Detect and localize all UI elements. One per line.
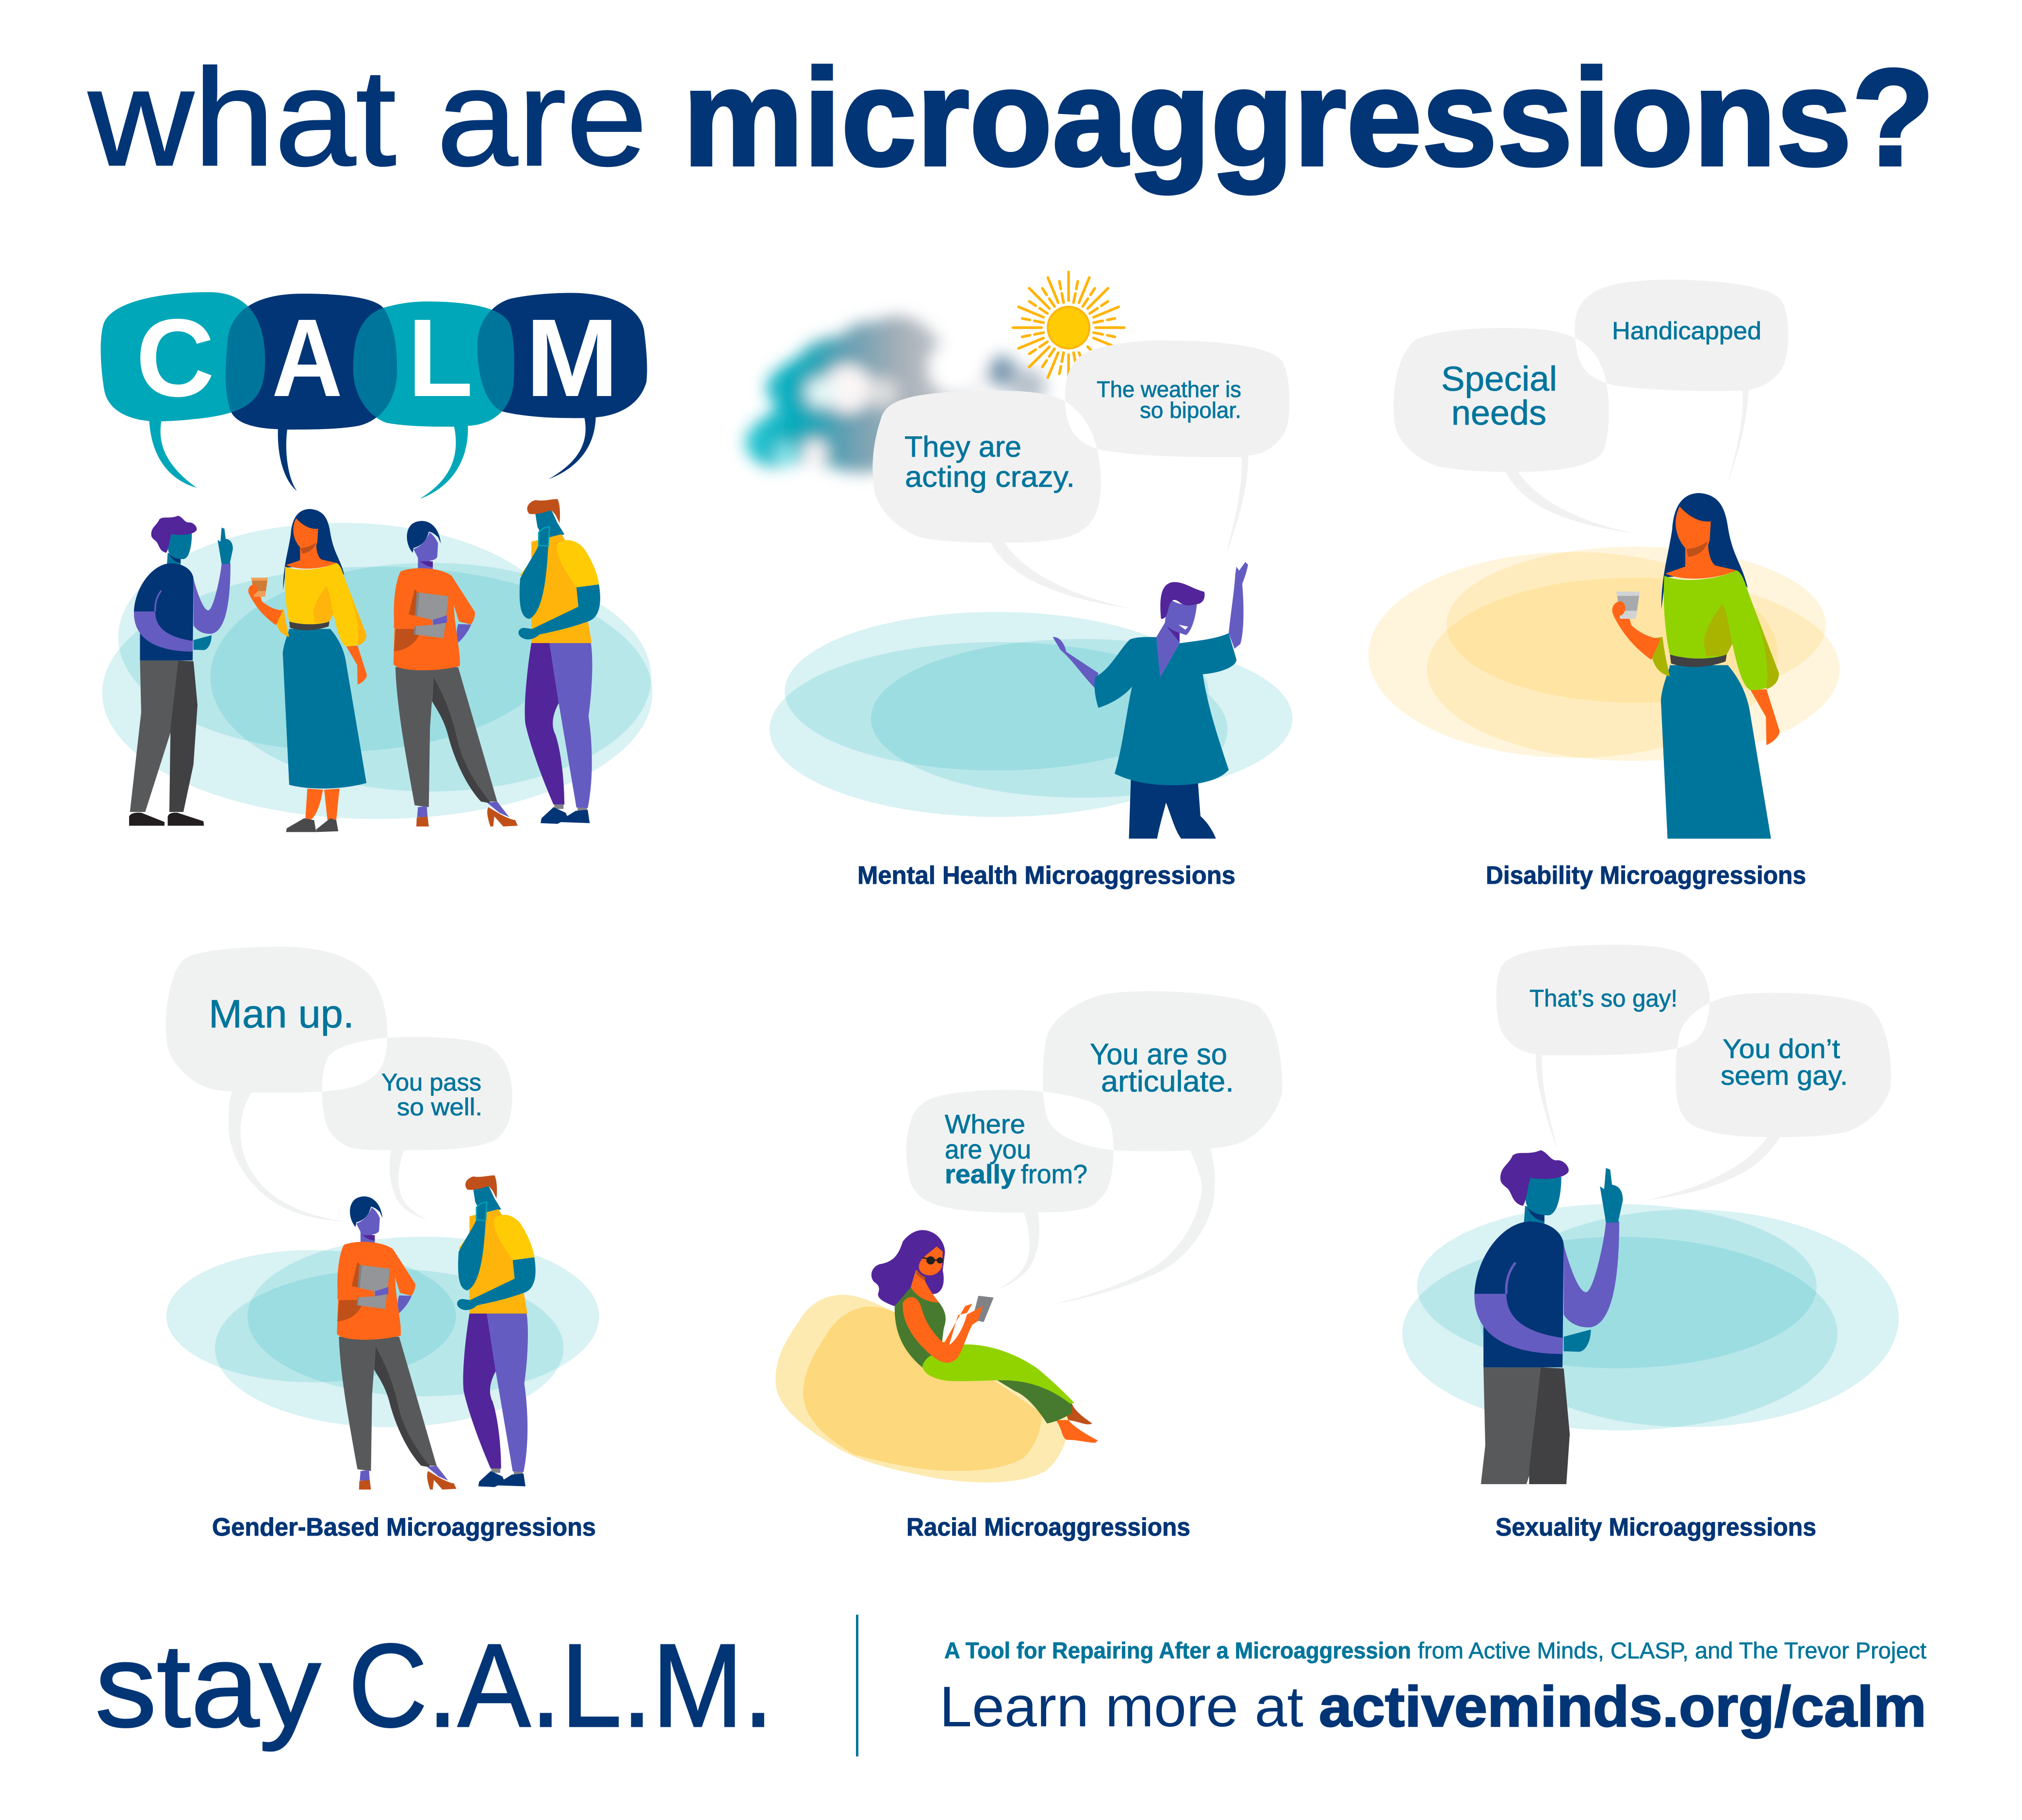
learn more line: Learn more at	[939, 1675, 1303, 1739]
label: Mental Health Microaggressions	[857, 861, 1235, 890]
speech bubbles	[166, 947, 512, 1222]
label: Gender-Based Microaggressions	[212, 1513, 596, 1541]
learn more line: activeminds.org/calm	[1319, 1675, 1926, 1739]
quote: The weather is so bipolar	[1097, 377, 1241, 423]
quote: You are so articulate: You are so	[1090, 1038, 1227, 1071]
quote: Where are you really from: from?	[1021, 1159, 1087, 1189]
quote: The weather is so bipolar: The weather is	[1097, 377, 1241, 402]
quote: You don't seem gay	[1721, 1033, 1848, 1091]
figure: man raising finger	[1474, 1150, 1623, 1484]
speech bubbles	[872, 340, 1289, 609]
ellipses background	[1368, 546, 1840, 761]
quote: You are so articulate: articulate.	[1101, 1065, 1234, 1098]
figures: two people talking	[337, 1175, 536, 1489]
quote: Man up: Man up.	[209, 992, 354, 1036]
speech bubbles	[906, 991, 1282, 1304]
source line: from Active Minds, CLASP, and The Trevor Project	[1418, 1638, 1926, 1663]
quote: Where are you really from: are you	[945, 1134, 1031, 1164]
panel: CALM people	[101, 292, 653, 832]
title	[86, 41, 1935, 195]
quote: You are so articulate	[1090, 1038, 1234, 1098]
quote: They are acting crazy	[904, 430, 1075, 493]
icon: cloud	[745, 316, 1046, 472]
ellipses background	[1402, 1204, 1899, 1430]
figure: man gesturing	[1052, 562, 1248, 839]
panel: disability	[1368, 280, 1840, 957]
quote: You pass so well	[381, 1069, 482, 1121]
panel: gender-based	[166, 947, 599, 1541]
vertical divider	[856, 1615, 858, 1756]
CALM letters	[136, 297, 619, 420]
four people	[129, 499, 600, 832]
quote: You pass so well: You pass	[381, 1069, 481, 1096]
quote: You pass so well: so well.	[397, 1093, 482, 1121]
CALM speech bubbles	[101, 292, 647, 499]
quote: You don't seem gay: You don’t	[1723, 1033, 1840, 1064]
label: Racial Microaggressions	[906, 1513, 1190, 1541]
learn more line	[939, 1675, 1926, 1739]
quote: They are acting crazy: They are	[904, 430, 1021, 463]
speech bubbles	[1496, 944, 1891, 1200]
stay C.A.L.M. heading: C.A.L.M.	[348, 1619, 773, 1752]
source line: A Tool for Repairing After a Microaggression	[944, 1638, 1411, 1663]
label: Disability Microaggressions	[1486, 861, 1806, 890]
source line	[944, 1638, 1926, 1663]
quote: Where are you really from: Where	[945, 1109, 1025, 1139]
title: microaggressions?	[683, 41, 1935, 195]
ellipses background	[166, 1237, 599, 1427]
CALM letters: L	[408, 297, 473, 420]
quote: Handicapped: Handicapped	[1612, 317, 1761, 345]
figure: woman with cup	[1612, 493, 1780, 839]
icon: sun	[1013, 272, 1124, 383]
label: Sexuality Microaggressions	[1496, 1513, 1816, 1541]
panel: sexuality	[1402, 944, 1899, 1541]
title: what are	[86, 41, 647, 195]
panel: racial	[775, 991, 1282, 1541]
quote: Special needs	[1441, 360, 1557, 432]
stay C.A.L.M. heading	[95, 1619, 773, 1752]
stay C.A.L.M. heading: stay	[95, 1619, 321, 1752]
CALM letters: C	[136, 297, 214, 420]
figure: woman on beanbag with tablet	[775, 1230, 1098, 1482]
quote: They are acting crazy: acting crazy.	[905, 461, 1075, 493]
ellipses background	[770, 612, 1293, 817]
quote: Where are you really from	[945, 1109, 1087, 1189]
ellipses background	[102, 523, 653, 819]
quote: Special needs: Special	[1441, 360, 1557, 398]
CALM letters: A	[272, 297, 343, 420]
quote: You don't seem gay: seem gay.	[1721, 1060, 1848, 1091]
quote: Special needs: needs	[1451, 394, 1546, 432]
quote: That's so gay: That’s so gay!	[1529, 985, 1677, 1012]
quote: The weather is so bipolar: so bipolar.	[1140, 397, 1241, 423]
speech bubbles	[1394, 280, 1788, 535]
panel: mental health	[745, 272, 1293, 890]
quote: Where are you really from: really	[945, 1159, 1016, 1189]
CALM letters: M	[526, 297, 619, 420]
